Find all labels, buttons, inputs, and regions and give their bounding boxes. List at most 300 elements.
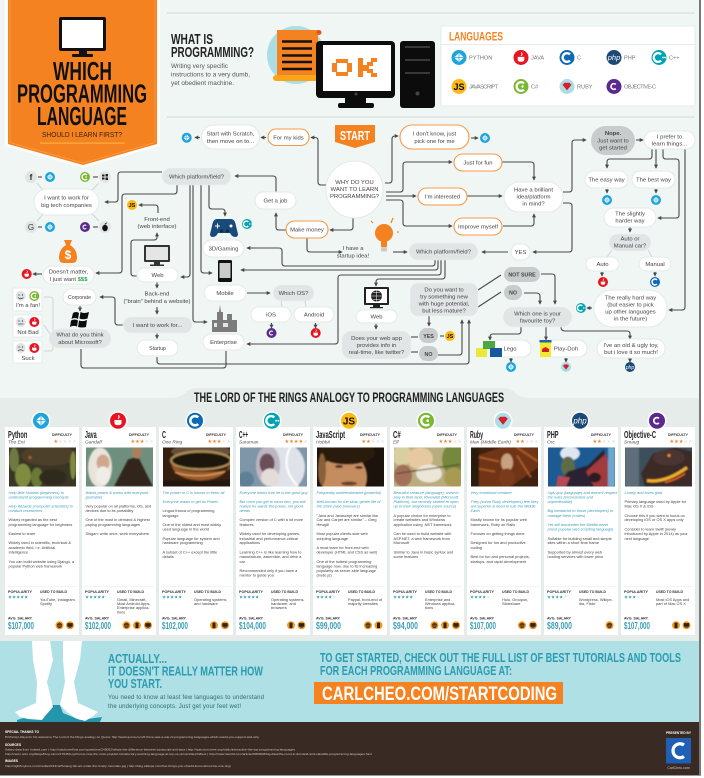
node: web right xyxy=(356,310,397,323)
python legend xyxy=(452,50,492,65)
node: mobile xyxy=(204,285,246,301)
description: hardware programming xyxy=(162,540,203,545)
description: some features xyxy=(394,554,418,559)
text: feet wet xyxy=(108,695,264,710)
heading: get started: FOR EACH PROGRAMMING LANGUAGE AT: xyxy=(320,664,512,678)
description: You can build website using Django, a xyxy=(8,559,75,564)
salary: $107,000 xyxy=(8,621,34,632)
php legend: PHP xyxy=(624,56,636,62)
node: i'm interested: I'm interested xyxy=(425,194,460,200)
icon: globe monitor xyxy=(364,287,389,308)
icon: lego blocks xyxy=(476,341,502,357)
node: for my kids: For my kids xyxy=(273,136,304,142)
description: (most popular web scripting language) xyxy=(548,526,614,532)
salary: $102,000 xyxy=(85,621,111,632)
popularity: ★★★★★ xyxy=(316,595,336,601)
node: have a brilliant idea xyxy=(504,182,563,212)
icon: c++ xyxy=(576,303,586,313)
description: Learning C++ is like learning how to xyxy=(240,550,301,554)
node: android xyxy=(294,307,334,322)
salary: $99,000 xyxy=(316,621,341,632)
salary xyxy=(8,616,34,632)
node: web: Web xyxy=(151,273,164,279)
difficulty: ★★★★★ xyxy=(362,439,385,445)
node: back-end xyxy=(123,292,191,305)
panel: call to action xyxy=(0,641,699,722)
node: back-end: ("brain" behind a website) xyxy=(123,299,191,305)
box: not bad: Not Bad xyxy=(17,330,39,336)
name: C xyxy=(162,430,166,441)
node: the easy way: The easy way xyxy=(588,178,625,184)
node: doesn't matter: Doesn't matter, xyxy=(49,270,89,276)
sources xyxy=(5,743,373,756)
popularity xyxy=(547,590,572,601)
description: Platform), but recently started to open xyxy=(394,499,459,504)
used to build: majority websites xyxy=(348,601,378,606)
popularity xyxy=(239,590,264,601)
description: Ugly guy (language) and doesn't respect xyxy=(548,490,618,495)
description: They (some Ruby developers) feel they xyxy=(470,499,539,504)
node: real-time web app: Does your web app xyxy=(351,336,403,342)
box: i'm a fan xyxy=(13,288,42,311)
node: front-end xyxy=(138,217,177,230)
description: developing iOS or OS X apps only xyxy=(624,517,684,522)
node: make money xyxy=(286,221,328,238)
images credits: http://nightfurylove.com/media/2013/12/Smaug-fan-art-under-the-lonely-mountain.jpg | http://blog.atlaspe.com/five-things-you-should-know-about-the-one-ring/ xyxy=(5,764,231,768)
name: JavaScript xyxy=(316,430,345,441)
heading: actually: YOU START. xyxy=(108,677,162,691)
name: Java xyxy=(85,430,97,441)
node: which platform left xyxy=(162,168,231,185)
node: i don't know: I don't know, just xyxy=(413,132,457,138)
node: nope: Just want to xyxy=(597,138,629,144)
heading: what is programming xyxy=(171,31,254,61)
sources: Salary data from Indeed.com | http://stackoverflow.com/questions/245062/whats-the-difference-between-javascript-and-java | http://spectrum.ieee.org/static/interactive-the-top-programming-languages xyxy=(5,748,296,752)
node: doesn't matter xyxy=(43,266,94,284)
description: developer (HTML and CSS as well) xyxy=(316,550,378,554)
icon: gamepad xyxy=(210,219,238,237)
description: Designed for fun and productive xyxy=(470,540,526,545)
node: the easy way xyxy=(585,171,628,188)
description: popularity as server-side language xyxy=(316,568,376,573)
node: yes: YES xyxy=(515,250,526,256)
description: academic field, i.e. Artificial xyxy=(8,545,55,550)
node: no xyxy=(504,285,522,300)
images credits: IMAGES xyxy=(5,759,19,763)
used to build: Operating systems xyxy=(194,597,226,602)
node: i prefer to learn: I prefer to xyxy=(657,134,683,140)
icon: javascript: JS xyxy=(129,203,136,209)
salary xyxy=(547,616,572,632)
used to build xyxy=(194,590,226,606)
salary: AVG. SALARY xyxy=(85,616,110,620)
difficulty: DIFFICULTY xyxy=(52,433,73,437)
description: devices due to its portability xyxy=(86,508,133,513)
name: Objective-C xyxy=(624,430,656,441)
node: lego xyxy=(491,340,531,357)
objective-c legend xyxy=(606,79,656,94)
analogy: Saruman xyxy=(239,440,259,446)
description: "Java and Javascript are similar like xyxy=(316,513,378,518)
analogy: The Ent xyxy=(8,440,25,446)
description: realize he wants the power, not good xyxy=(240,504,304,508)
node: startup idea: startup idea! xyxy=(337,254,370,260)
node: not sure xyxy=(504,267,540,282)
description: Everyone thinks that he is the good guy xyxy=(240,490,309,495)
used to build: USED TO BUILD xyxy=(40,590,67,594)
node: startup idea: I have a xyxy=(343,246,364,252)
sources: SOURCES xyxy=(5,743,22,747)
card: c++: C++ xyxy=(239,430,248,441)
platform icons xyxy=(364,621,382,629)
description: Focuses on getting things done xyxy=(470,531,525,536)
c legend xyxy=(560,50,581,65)
card: c# xyxy=(390,411,466,635)
description: mentor to guide you xyxy=(240,572,274,578)
sources: http://cacm.acm.org/blogs/blog-cacm/176450-python-is-now-the-most-popular-introductory-teaching-language-at-top-us-universities/fulltext | http://www.itworld.com/article/2683608/big-data/the-most-in-demand-and-valuable-programming-languages.html xyxy=(5,752,373,756)
description: create websites and Windows xyxy=(394,517,445,522)
description: A subset of C++ except the little xyxy=(162,550,217,554)
node: slightly harder way: harder way xyxy=(615,218,645,224)
node: nope xyxy=(591,126,635,155)
popularity xyxy=(85,590,110,601)
description: The power of C is known to them all xyxy=(162,490,224,495)
description: programming language for beginners xyxy=(8,522,72,527)
card: python xyxy=(5,411,79,635)
used to build: browsers xyxy=(271,605,287,610)
popularity: ★★★★★ xyxy=(239,595,259,601)
difficulty xyxy=(514,433,539,445)
node: real-time web app: provides info in xyxy=(357,343,396,349)
platform icons xyxy=(56,621,74,629)
image: man of middle earth xyxy=(471,448,538,486)
icon: enterprise building xyxy=(212,305,237,332)
node: i'm interested xyxy=(418,188,467,205)
node: why do you want to learn programming xyxy=(326,161,383,218)
node: startup: Startup xyxy=(149,346,166,352)
icon: objective-c xyxy=(266,328,276,338)
icon: apple xyxy=(99,221,111,233)
node: which platform right: Which platform/field? xyxy=(416,250,472,256)
used to build xyxy=(117,590,151,614)
node: corporate: Corporate xyxy=(68,295,91,301)
objective-c legend: OBJECTIVE-C xyxy=(624,84,656,90)
description: Hewgill xyxy=(316,522,329,527)
difficulty: DIFFICULTY xyxy=(437,433,458,437)
icon: light bulb xyxy=(371,218,399,252)
node: auto or manual: Manual car? xyxy=(614,244,647,250)
used to build: hardware, and xyxy=(271,601,296,606)
node: not sure: NOT SURE xyxy=(508,272,536,278)
node: really hard way: up other languages xyxy=(605,310,656,316)
description: stay in their land, Rivendell (Microsoft xyxy=(394,494,459,499)
text: programming definition: yet obedient machine. xyxy=(171,80,234,87)
panel: footer xyxy=(0,722,699,775)
difficulty: DIFFICULTY xyxy=(591,433,612,437)
description: manage them (codes) xyxy=(548,513,586,518)
used to build: Hulu, Groupon, xyxy=(502,597,528,602)
used to build: Wordpress, Wikipe- xyxy=(579,597,614,602)
description: Lingua franca of programming xyxy=(162,508,214,513)
difficulty: DIFFICULTY xyxy=(206,433,227,437)
icon: play-doh tub xyxy=(540,340,552,357)
node: start with scratch xyxy=(202,125,260,149)
special thanks: SPECIAL THANKS TO xyxy=(5,730,39,734)
description: Primary language used by Apple for xyxy=(624,499,687,504)
node: improve myself: Improve myself xyxy=(458,224,498,230)
icon: python xyxy=(32,411,50,430)
description: Big headache to those (developers) to xyxy=(548,508,614,513)
node: yes pill xyxy=(419,328,438,343)
node: i prefer to learn: learn things... xyxy=(652,142,688,148)
node: yes xyxy=(511,244,530,260)
description: popular Python web framework xyxy=(8,564,62,568)
node: make money: Make money xyxy=(290,228,324,234)
node: improve myself xyxy=(454,218,502,235)
platform icons xyxy=(210,621,229,629)
c# legend: C# xyxy=(531,84,539,90)
salary xyxy=(85,616,111,632)
subtitle: SHOULD I LEARN FIRST? xyxy=(42,130,122,139)
description: language now, due to its increasing xyxy=(316,564,377,568)
description: understand programming concepts xyxy=(8,494,69,499)
description: Widely used in scientific, technical & xyxy=(8,540,71,545)
popularity: ★★★★★ xyxy=(624,595,644,601)
icon: python xyxy=(602,195,612,205)
description: (portable) xyxy=(86,494,103,499)
node: old and ugly toy: but i love it so much! xyxy=(604,350,658,356)
icon: money bag: $ xyxy=(65,248,72,262)
name: Ruby xyxy=(470,430,483,441)
description: Help little Hobbits (beginners) to xyxy=(8,490,65,495)
description: introduced by Apple in 2014) as your xyxy=(624,531,688,536)
text: programming definition: instructions to a very dumb, xyxy=(171,72,250,78)
node: auto: Auto xyxy=(596,262,609,268)
salary: $102,000 xyxy=(162,621,188,632)
description: Beautiful creature (language), used to xyxy=(394,490,459,495)
node: 3d gaming xyxy=(203,240,244,257)
description: industrial and performance-critical xyxy=(240,536,298,541)
node: i don't know xyxy=(400,125,469,149)
node: no: NO xyxy=(509,290,517,296)
icon: python xyxy=(182,133,192,143)
description: hosting services with lower price xyxy=(548,554,603,559)
node: start with scratch: Start with Scratch, xyxy=(207,132,255,138)
node: i want to work for: I want to work for... xyxy=(133,323,183,329)
description: unpredictable) xyxy=(548,499,573,504)
node: really hard way: in the future) xyxy=(614,316,647,322)
node: big tech: I want to work for xyxy=(44,196,89,202)
popularity: ★★★★★ xyxy=(393,595,413,601)
icon: php xyxy=(625,362,635,372)
box: i'm a fan: I'm a fan! xyxy=(16,303,40,309)
salary: $107,000 xyxy=(624,621,650,632)
node: have a brilliant idea: Have a brilliant xyxy=(514,188,553,194)
description: Car and Carpet are similar" – Greg xyxy=(316,517,376,522)
description: One of the hottest programming xyxy=(316,559,371,564)
description: are superior & need to rule the Middle xyxy=(470,504,536,508)
node: real-time web app: real-time, like twitter? xyxy=(349,350,405,356)
popularity xyxy=(393,590,418,601)
image: legolas xyxy=(394,448,461,486)
salary: AVG. SALARY xyxy=(162,616,187,620)
description: Everyone wants to get its Power xyxy=(162,499,219,504)
difficulty xyxy=(283,433,308,445)
name: C# xyxy=(393,430,401,441)
node: which platform left: Which platform/field? xyxy=(169,174,225,180)
heading: actually: IT DOESN'T REALLY MATTER HOW xyxy=(108,664,263,678)
heading: get started xyxy=(320,651,681,678)
node: mobile: Mobile xyxy=(216,291,234,297)
text: programming definition xyxy=(171,63,250,87)
description: the Shire (web browsers) xyxy=(316,504,360,508)
description: the rules (inconsistent and xyxy=(548,494,594,499)
node: corporate xyxy=(63,289,96,305)
icon: javascript xyxy=(127,200,137,210)
node: something new: with huge potential, xyxy=(418,302,470,308)
icon: c# xyxy=(80,172,90,182)
used to build: Spotify xyxy=(40,601,52,606)
node: favourite toy xyxy=(503,307,572,327)
used to build: Enterprise and xyxy=(425,597,450,602)
description: features xyxy=(240,522,254,527)
image: smaug xyxy=(625,448,692,486)
special thanks xyxy=(5,730,260,739)
node: favourite toy: favourite toy? xyxy=(520,318,556,324)
salary xyxy=(393,616,418,632)
used to build: USED TO BUILD xyxy=(656,590,683,594)
c++ legend xyxy=(652,50,680,65)
analogy: Man (Middle Earth) xyxy=(470,440,511,446)
node: web right: Web xyxy=(370,314,383,320)
node: something new: try something new xyxy=(420,294,469,300)
title text: LANGUAGE xyxy=(37,101,127,131)
image: saruman xyxy=(240,448,307,486)
icon: python xyxy=(651,195,661,205)
description: used language in the world xyxy=(162,526,209,532)
difficulty: DIFFICULTY xyxy=(283,433,304,437)
description: Frequently underestimated (powerful) xyxy=(316,490,382,495)
node: android: Android xyxy=(304,312,324,318)
flowchart nodes xyxy=(13,125,695,372)
card: c xyxy=(159,411,233,635)
salary xyxy=(470,616,496,632)
used to build: USED TO BUILD xyxy=(348,590,375,594)
description: Yet still dominates the Middle-earth xyxy=(548,522,608,527)
title text: WHICH xyxy=(53,56,112,86)
description: One of the oldest and most widely xyxy=(162,522,221,527)
platform icons xyxy=(672,621,690,629)
used to build: dia, Flickr xyxy=(579,601,596,606)
name: Python xyxy=(8,430,27,441)
popularity: POPULARITY xyxy=(239,590,264,594)
card: objective-c xyxy=(621,411,695,635)
text: programming definition: Writing very specific xyxy=(171,63,229,70)
node: start with scratch: then move on to... xyxy=(207,139,254,145)
used to build: USED TO BUILD xyxy=(579,590,606,594)
used to build: part of Mac OS X xyxy=(656,601,686,606)
icon: money bag xyxy=(59,240,77,263)
ruby legend: RUBY xyxy=(577,84,593,90)
php legend xyxy=(606,50,636,65)
description: Popular language for system and xyxy=(162,536,220,541)
used to build: Paypal, front-end of xyxy=(348,597,383,602)
node: yes pill: YES xyxy=(423,334,434,340)
node: no pill: NO xyxy=(425,352,432,358)
difficulty xyxy=(129,433,154,445)
image: the ent xyxy=(9,448,76,486)
used to build xyxy=(425,590,456,610)
node: manual xyxy=(639,257,671,271)
used to build xyxy=(40,590,76,606)
node: why do you want to learn programming: WANT TO LEARN xyxy=(331,187,378,193)
difficulty xyxy=(437,433,462,445)
difficulty: DIFFICULTY xyxy=(514,433,535,437)
images credits xyxy=(5,759,231,768)
icon: c++ xyxy=(242,219,252,229)
used to build: Windows applica- xyxy=(425,601,456,606)
used to build: USED TO BUILD xyxy=(194,590,221,594)
description: Help Wizards (computer scientists) to xyxy=(8,504,74,508)
node: have a brilliant idea: in mind? xyxy=(522,202,545,208)
analogy: One Ring xyxy=(162,440,183,446)
platform icons xyxy=(518,621,537,629)
start banner: START xyxy=(340,128,370,143)
used to build: Operating systems, xyxy=(271,597,305,602)
icon: facebook: f xyxy=(30,173,33,182)
description: Most popular clients-side web xyxy=(316,531,368,536)
description: (node.js) xyxy=(316,572,332,578)
javascript legend: JS xyxy=(453,82,465,92)
special thanks: Prithviraj Udaya for his awesome The Lord of the Rings analogy on Quora: http://www.quora.com/If-there-was-a-war-of-programming-languages-which-would-you-support-and-why xyxy=(5,735,260,739)
icon: objective-c xyxy=(648,411,666,430)
icon: python xyxy=(506,362,516,372)
node: which os xyxy=(273,285,314,301)
popularity: POPULARITY xyxy=(393,590,418,594)
description: Mac OS X & iOS xyxy=(624,504,654,508)
title text: PROGRAMMING xyxy=(17,78,147,108)
node: big tech: big tech companies xyxy=(41,203,92,209)
title text xyxy=(17,56,147,131)
icon: php: php xyxy=(572,416,587,426)
popularity: POPULARITY xyxy=(624,590,649,594)
description: next language xyxy=(624,536,649,541)
node: i don't know: pick one for me xyxy=(414,139,455,145)
text: feet wet: the underlying concepts. Just get your feet wet! xyxy=(108,704,241,710)
difficulty xyxy=(360,433,385,445)
node: have a brilliant idea: idea/platform xyxy=(516,194,551,200)
description: Mostly known for its popular web xyxy=(470,517,527,522)
popularity xyxy=(316,590,341,601)
salary: $107,000 xyxy=(470,621,496,632)
c++ legend: C++ xyxy=(669,56,680,62)
icon: javascript xyxy=(340,411,358,430)
right edge shadow xyxy=(699,0,701,776)
platform icons xyxy=(430,621,460,629)
node: ios: iOS xyxy=(266,312,276,318)
card: php xyxy=(544,411,618,635)
node: what do you think about microsoft: What do you think xyxy=(56,332,104,338)
heading: what is programming: PROGRAMMING? xyxy=(171,44,254,61)
description: manufacture, assemble, and drive a xyxy=(240,554,302,559)
node: manual: Manual xyxy=(645,262,665,268)
used to build: and hardware xyxy=(194,601,218,606)
icon: python xyxy=(45,172,55,182)
description: car xyxy=(240,559,246,564)
description: Microsoft xyxy=(394,540,410,545)
php legend: php xyxy=(607,53,620,62)
description: Best for fun and personal projects, xyxy=(470,554,530,559)
